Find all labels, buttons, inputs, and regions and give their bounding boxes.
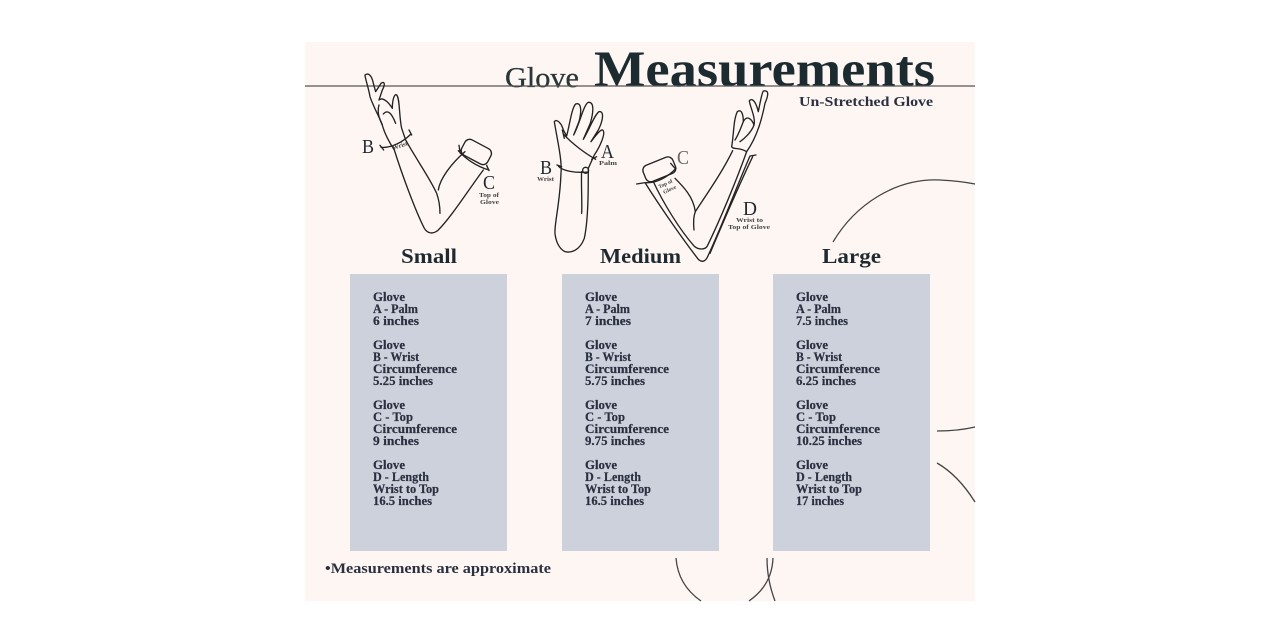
small measurements: 5.25 inches [373,374,433,388]
title: Measurements [594,42,935,98]
illustration: right arm with length bracket [637,91,768,261]
label: top of glove small: Top of [479,192,500,199]
small measurements: C - Top [373,410,413,424]
background panel [305,42,975,601]
label: C right: C [677,147,689,169]
title: Glove [505,63,579,94]
medium measurements: Wrist to Top [585,482,651,496]
large measurements: Circumference [796,362,880,376]
label: C small: C [483,172,495,194]
small measurements: Circumference [373,422,457,436]
large measurements: 10.25 inches [796,434,862,448]
label: A palm [599,141,618,167]
header rule [305,85,975,87]
small measurements: B - Wrist [373,350,420,364]
illustration: small arm [365,74,493,233]
size heading: Small: Small [401,244,457,268]
small measurements: 9 inches [373,434,419,448]
large measurements: D - Length [796,470,852,484]
large measurements: Glove [796,458,828,472]
small measurements: 6 inches [373,314,419,328]
medium measurements: B - Wrist [585,350,632,364]
label: D wrist to top: Top of Glove [728,224,770,231]
size heading: Medium: Medium [600,244,682,268]
label: wrist small: Wrist [391,140,409,152]
label: top of glove right [658,178,678,197]
small measurements: Glove [373,338,405,352]
label: top of glove small [479,192,500,206]
medium measurements: Circumference [585,422,669,436]
medium measurements: C - Top [585,410,625,424]
medium measurements: 7 inches [585,314,631,328]
large measurements: 6.25 inches [796,374,856,388]
small measurements: Glove [373,398,405,412]
small measurements: D - Length [373,470,429,484]
medium measurements: 16.5 inches [585,494,644,508]
label: D wrist to top: D [743,198,757,220]
small measurements: Wrist to Top [373,482,439,496]
large measurements: Glove [796,398,828,412]
large measurements [796,290,880,508]
label: D wrist to top [728,198,770,231]
medium measurements: Glove [585,458,617,472]
medium measurements: 5.75 inches [585,374,645,388]
footnote: •Measurements are approximate [325,561,551,577]
large measurements: 17 inches [796,494,844,508]
size heading: Large: Large [822,244,881,268]
medium measurements: Circumference [585,362,669,376]
large measurements: Glove [796,338,828,352]
label: top of glove right: Top of [658,178,674,190]
small measurements: A - Palm [373,302,419,316]
panel: large [773,274,930,551]
label: A palm: A [601,141,614,163]
label: B small: B [362,136,374,158]
medium measurements: Glove [585,398,617,412]
label: B wrist: Wrist [537,176,555,183]
medium measurements: Glove [585,290,617,304]
medium measurements [585,290,669,508]
small measurements: Glove [373,290,405,304]
subtitle: Un-Stretched Glove [799,95,933,110]
small measurements: 16.5 inches [373,494,432,508]
small measurements: Glove [373,458,405,472]
large measurements: Glove [796,290,828,304]
label: A palm: Palm [599,160,618,167]
large measurements: B - Wrist [796,350,843,364]
label: top of glove right: Glove [662,184,678,196]
large measurements: A - Palm [796,302,842,316]
medium measurements: 9.75 inches [585,434,645,448]
medium measurements: A - Palm [585,302,631,316]
label: B wrist [537,157,555,183]
medium measurements: Glove [585,338,617,352]
label: top of glove small: Glove [480,199,499,206]
label: D wrist to top: Wrist to [736,217,763,224]
large measurements: Wrist to Top [796,482,862,496]
panel: small [350,274,507,551]
small measurements [373,290,457,508]
large measurements: C - Top [796,410,836,424]
illustration: middle arm [554,102,604,252]
small measurements: Circumference [373,362,457,376]
large measurements: 7.5 inches [796,314,848,328]
label: B wrist: B [540,157,552,179]
panel: medium [562,274,719,551]
large measurements: Circumference [796,422,880,436]
decorative curves [676,180,975,601]
medium measurements: D - Length [585,470,641,484]
